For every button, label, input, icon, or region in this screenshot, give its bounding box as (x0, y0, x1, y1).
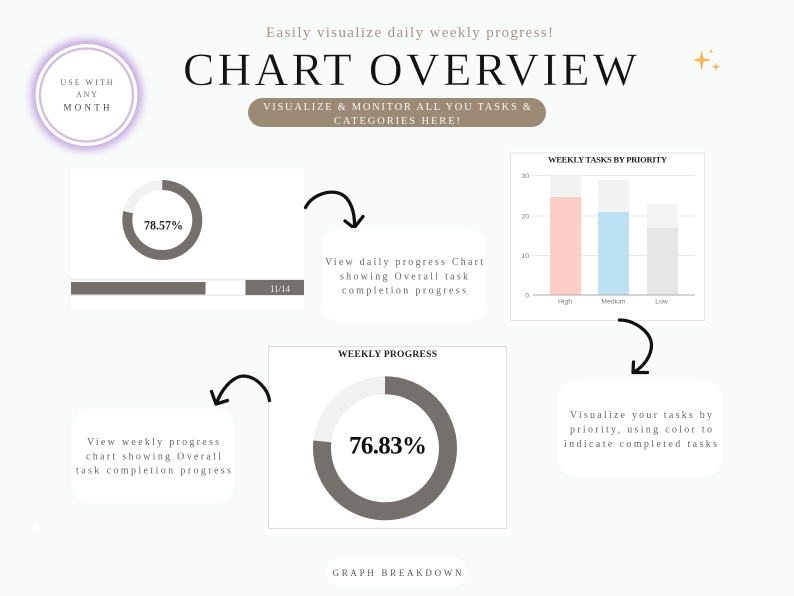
bar chart: Low (655, 298, 668, 306)
bar chart (521, 173, 695, 306)
arrow: weekly chart to callout (212, 376, 270, 404)
weekly progress donut: 76.83% (349, 432, 427, 460)
callout: daily progress: showing Overall task (340, 272, 468, 282)
callout: daily progress (322, 228, 486, 323)
callout: priority: indicate completed tasks (564, 439, 717, 450)
daily progress donut (127, 185, 197, 255)
callout: weekly progress (72, 409, 234, 503)
callout: weekly progress: task completion progress (76, 466, 231, 476)
badge: use with any month (32, 40, 142, 150)
daily progress donut: 78.57% (144, 218, 183, 232)
bar chart: 10 (521, 253, 529, 260)
callout: priority: Visualize your tasks by (570, 410, 712, 421)
banner pill (248, 98, 546, 127)
banner pill: VISUALIZE & MONITOR ALL YOU TASKS & (263, 102, 531, 113)
arrow: priority chart to callout (620, 320, 652, 372)
callout: priority (558, 380, 722, 477)
banner pill: CATEGORIES HERE! (334, 116, 460, 127)
footer pill: graph breakdown: GRAPH BREAKDOWN (332, 568, 462, 578)
badge: use with any month: USE WITH (60, 78, 113, 87)
badge: use with any month: ANY (76, 90, 97, 99)
callout: weekly progress: View weekly progress (87, 437, 219, 448)
callout: daily progress: View daily progress Chart (325, 257, 483, 268)
icon: faint sparkle (29, 521, 45, 534)
panel: weekly progress (265, 344, 509, 534)
badge: use with any month: MONTH (64, 102, 110, 112)
bar chart: Medium (601, 298, 626, 306)
callout: priority: priority, using color to (570, 424, 712, 436)
weekly progress donut (322, 385, 448, 511)
daily progress bar: 11/14 (270, 284, 290, 294)
title: CHART OVERVIEW (183, 44, 638, 96)
bar chart: 0 (525, 292, 529, 300)
weekly progress heading: WEEKLY PROGRESS (338, 350, 437, 360)
footer pill: graph breakdown (326, 558, 467, 586)
panel: weekly tasks by priority (508, 150, 707, 325)
sparkles icon (692, 48, 720, 71)
bar chart: High (558, 298, 572, 306)
arrow: daily chart to callout (306, 192, 363, 228)
subtitle: Easily visualize daily weekly progress! (266, 25, 553, 41)
bar chart: 30 (521, 173, 529, 180)
callout: weekly progress: chart showing Overall (86, 452, 221, 462)
callout: daily progress: completion progress (342, 286, 466, 296)
panel: daily progress (71, 169, 304, 309)
chart title: WEEKLY TASKS BY PRIORITY (548, 154, 667, 164)
bar chart: 20 (521, 214, 529, 220)
daily progress bar (71, 279, 304, 296)
